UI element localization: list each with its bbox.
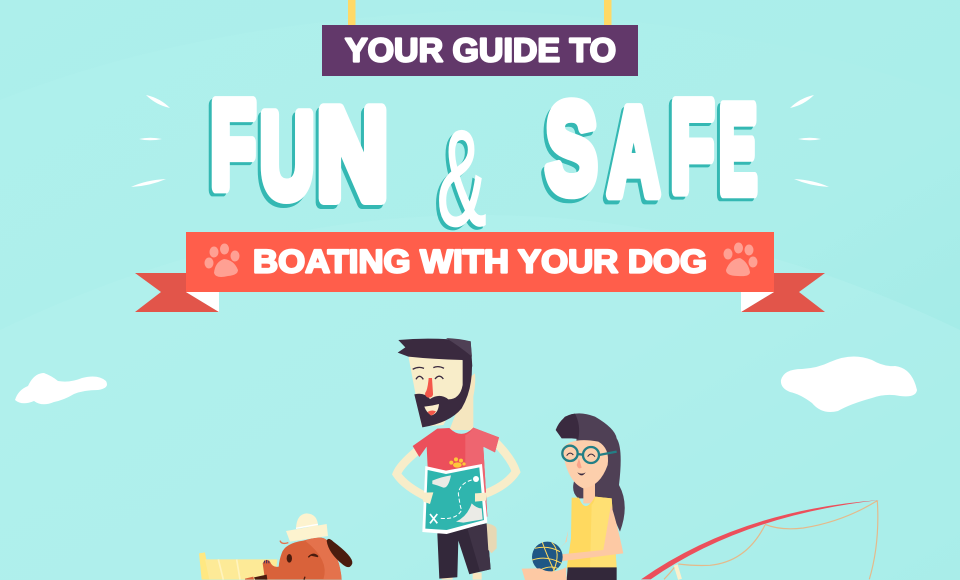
title word: safe: E [719,81,757,219]
dog hat [286,513,328,542]
dog paw and leg [245,560,305,580]
title word: safe: A [605,88,657,225]
illustration: dog on deck chair [199,513,352,580]
woman face [562,440,608,488]
title word: fun: U [260,89,314,223]
illustration: fishing rod [641,500,880,579]
paw on shirt [449,457,466,468]
title word: fun: F [208,79,253,217]
man face [408,356,463,427]
hanging strings [348,0,612,26]
title word: safe: E [716,84,754,222]
woman neck [583,478,595,503]
man beard [414,358,472,427]
woman glasses [562,446,617,463]
man hands [421,492,487,504]
title word: safe [543,75,757,225]
man eyes [413,367,444,379]
woman hair back [563,413,625,532]
ampersand: & [434,106,483,258]
title word: fun: F [210,76,256,214]
woman eyes and mouth [567,453,595,457]
illustration: man holding a map [397,338,516,580]
title word: safe: A [608,84,660,221]
dog tuft [280,541,288,543]
dog eyes [287,554,318,563]
cloud left [15,373,107,404]
man shorts [437,523,491,579]
woman arm [555,505,623,562]
man neck [449,373,475,430]
icon: paw right [724,242,758,276]
title word: fun: N [314,87,385,231]
man shirt [413,428,499,517]
sparkle lines right [790,95,829,187]
title word: fun: N [317,83,388,227]
top banner: your guide to: YOUR GUIDE TO [345,32,616,68]
title word: safe: S [543,83,594,224]
man arms [397,442,516,498]
woman top [567,497,617,568]
dog body [279,538,342,580]
title word: safe: S [546,79,597,220]
man hair [398,339,472,367]
cloud right [781,356,917,412]
ribbon tail right [741,273,825,312]
title word: safe: F [671,75,714,217]
man legs [442,573,482,580]
ribbon tail left [135,273,219,312]
dog ear [327,539,352,567]
sparkle lines left [131,95,170,187]
ribbon banner [135,232,825,312]
deck chair [199,552,210,580]
icon: paw left [204,244,240,277]
ampersand: & [437,103,486,255]
top banner: your guide to [322,25,638,76]
woman skirt [567,567,617,580]
title word: safe: F [668,78,711,220]
woman ball [532,542,563,572]
illustration: woman with ball [522,413,625,580]
ribbon text: BOATING WITH YOUR DOG [253,244,707,280]
title word: fun [208,76,388,231]
woman lap hand [522,567,567,580]
man mouth [424,404,439,415]
man pouch [487,523,497,553]
man nose [425,378,433,398]
man map [422,464,487,534]
title word: fun: U [257,93,311,227]
ribbon body [186,232,774,292]
